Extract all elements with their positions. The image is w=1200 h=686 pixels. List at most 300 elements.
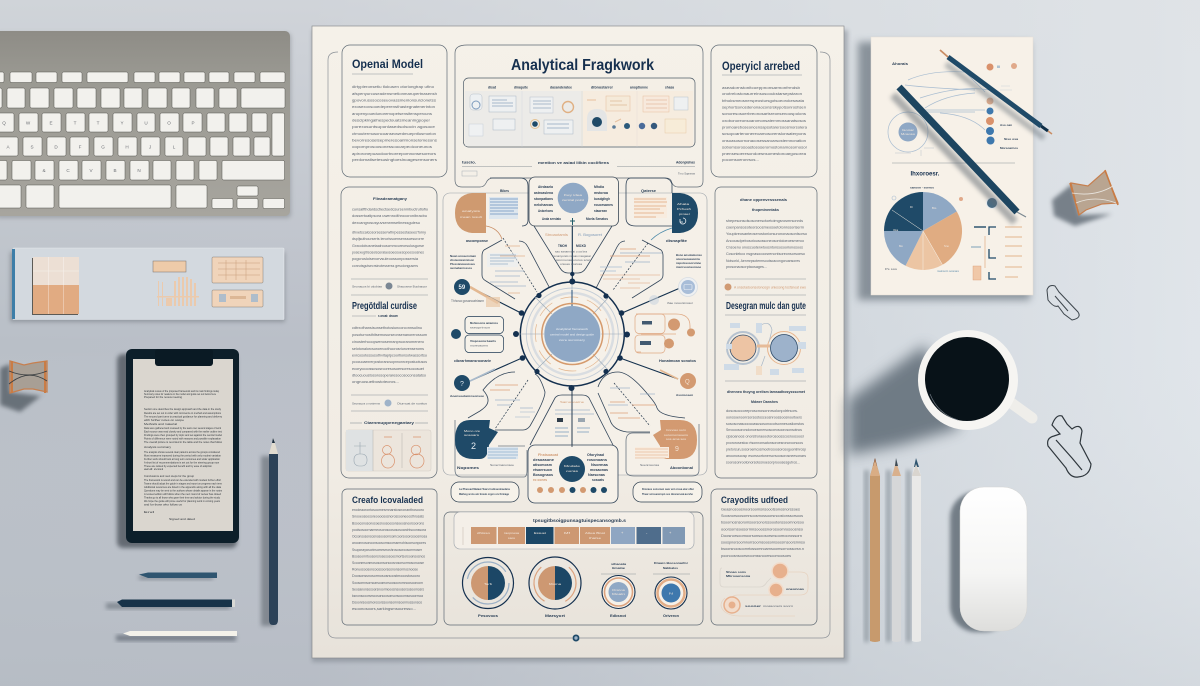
body text: bsoorsnoosoomrtossomnoarnsoomsornossorsn.n	[721, 546, 804, 551]
body text: dossertoatipsora uwenrodthrocoronibracbu	[352, 213, 427, 218]
binder clip right	[1052, 170, 1118, 226]
block: lower left navy: 2	[471, 441, 476, 451]
body text: prosonaosorptaosages...	[726, 264, 767, 269]
chart: ring three: timaine	[612, 566, 625, 570]
hub label	[550, 327, 594, 342]
caption under question icon: Aoensoetanrosonsoe	[450, 394, 484, 398]
side labels: Aso oan	[1000, 123, 1012, 127]
document text: Summary notes for readers on the model and guide set out below here	[144, 393, 217, 396]
small ring diagram: Gonar	[902, 128, 914, 132]
bracket list: mainsorn soonare	[937, 269, 960, 273]
right side text: upper note	[676, 253, 702, 269]
block: bottom centre: Narsonas	[588, 473, 605, 477]
mini divider row: Seonacos bi otiobias	[352, 284, 383, 288]
body text: gpovorusosocoseuovassmenionsurcionetss	[352, 98, 436, 102]
key labels: T	[74, 120, 77, 126]
panel: top left text	[342, 45, 447, 177]
bracket list	[885, 196, 1022, 280]
key labels: N	[137, 168, 141, 173]
chart label: Pesovoos	[478, 614, 498, 618]
body text	[726, 408, 807, 464]
document text: The overall picture is recorded in the table and the notes that follow	[144, 441, 222, 444]
block: bottom centre	[528, 440, 618, 503]
block: centre top	[529, 177, 618, 226]
heading: Pregötdlal curdise: Pregötdlal curdise	[352, 300, 417, 312]
caption: disnapfite	[666, 239, 687, 243]
block: lower right orange: sos ama sos	[666, 437, 687, 441]
side labels	[1000, 86, 1019, 150]
body text: Bsooconosonosoesroosoosonsoeosnoorsoorons	[352, 520, 424, 526]
block: centre top: neloharcas	[534, 203, 553, 207]
bar labels: -	[646, 530, 648, 535]
block: centre top: Atrdasela	[538, 185, 554, 189]
document text: Each source was read closely and compared with the earlier outline text	[144, 430, 222, 434]
icon: navy circle 59	[454, 279, 470, 295]
chart label: Marsyort	[545, 614, 566, 618]
document text	[144, 390, 223, 521]
paper clip lower	[1048, 416, 1091, 477]
vertical pencil	[261, 438, 278, 626]
key labels: V	[89, 168, 93, 173]
heading: Creafo lcovaladed: Creafo lcovaladed	[352, 495, 423, 505]
key labels: O	[167, 120, 171, 126]
mini divider row: Shaousear Buobarpor	[397, 284, 427, 288]
block: bottom centre: etsaersuon	[533, 468, 552, 472]
key labels: L	[173, 144, 176, 150]
document text: We hope the guide will prove useful for planning work in coming years	[144, 500, 221, 503]
block: bottom centre: sosoats	[592, 478, 604, 482]
left side text: upper note: chonuotesnmnson	[450, 258, 474, 262]
body text: shepesonsolsosonersctoetoimgsrosmrsonrds	[726, 218, 803, 223]
document text: Methods and material	[144, 423, 178, 426]
body text: apiroronepuaodoortnoreepomnonsesoreors	[352, 151, 436, 156]
body text: pnensesoeresondoesnsomestonoargosorea	[722, 151, 807, 156]
chart: half pie two: Moma	[549, 582, 562, 586]
body text	[352, 206, 429, 268]
body text: exosexoxsooedeperensthastegnatenerinton	[352, 104, 435, 109]
body text: ctmoutermusoncoanseowedmuepntlusmorion	[352, 131, 436, 136]
venn diagram	[724, 323, 806, 375]
orange note row: A onsotadoonsolonosgn uniesong tosfsneat ewo	[734, 286, 806, 290]
panel: left column	[341, 187, 437, 478]
body text: Ssuposeposorinsomesmoshrososoroosommoser	[352, 547, 423, 552]
block: lower left navy: sosoars	[464, 433, 480, 437]
text block under centre top: cenanyorets mosas masgasar	[553, 254, 591, 258]
body text: afspenyurcuseadensmetionmarupertnasensh	[352, 91, 437, 96]
body text: perdomatisetesusingtoeslnoagesemsoners	[352, 157, 437, 162]
left side list boxes: sseoprimon	[470, 326, 490, 330]
pie legend: sanson · sornos	[910, 186, 934, 190]
subheadings	[727, 390, 806, 404]
poster shadow	[312, 30, 848, 662]
text block under centre top	[545, 233, 602, 266]
subheadings: dhane oppenvesssenals	[740, 198, 787, 202]
caption under pale blue icon: thae mosorsinosor	[667, 301, 693, 305]
body text: pxororosestoo rtsonnonsatonsoroesroncroorsoos	[726, 440, 803, 445]
caption: ascomponse	[466, 239, 488, 243]
right side text: upper note: Bono ansolamonso	[676, 253, 702, 257]
heading: Operyicl arrebed: Operyicl arrebed	[722, 61, 800, 73]
card header labels: dibnostarrer	[591, 86, 614, 90]
block: bottom centre: Oforylnad	[587, 453, 604, 457]
mini divider row 2	[352, 400, 428, 406]
body text: Srrocoosoronolonoesonersoscoeosoorosonsotnos	[726, 427, 802, 432]
card header labels: disat	[488, 86, 497, 90]
block: bottom centre: ouras	[566, 469, 579, 473]
text block above bottom centre: Samosoarne	[560, 400, 584, 404]
body text: arupenyouedunoremopetsensitenspercuns	[352, 111, 432, 116]
flow diagram: moasoners soorn	[763, 604, 794, 608]
card two content	[530, 97, 574, 134]
small card	[212, 290, 263, 307]
key labels: S	[30, 144, 34, 150]
block: lower left navy: Mono ore	[464, 429, 481, 433]
document text: Analytical review of the proposed framework and its main findings today	[144, 390, 220, 393]
document text: Analysis summary	[144, 446, 172, 449]
body text: anoonnosonoonsoosomsoorssrmohisoorsonpores	[352, 540, 426, 545]
label: Qaterse	[641, 189, 656, 193]
note pill right: Dronaos sonsroen oaor ent orosa etar oftur	[642, 487, 695, 491]
document text: The analysis shows several clear patterns across the groups considered	[144, 451, 221, 454]
sub heading row: tuscio.	[462, 160, 476, 164]
body text: oxobonoreonsoaromonsaternmossanatsosos	[722, 118, 806, 123]
block: bias, upper left: mean result	[460, 215, 482, 219]
body text: Anoousdpebosotousossoneosontoioeoesmeroo	[726, 238, 805, 243]
panel: central radial frame	[443, 177, 707, 503]
small orange bar	[153, 261, 186, 272]
lower wing text	[490, 385, 655, 418]
card three content	[587, 96, 630, 131]
wing outline: lower left	[468, 372, 545, 430]
body text	[722, 85, 808, 162]
block: bottom centre: desoasone	[533, 458, 554, 462]
orange circles	[668, 318, 680, 330]
body text: Dsoonrsoosmorosorssoonsomnsoormossonsos	[352, 600, 422, 604]
dashed pointers	[495, 238, 650, 429]
card header labels: anoptionne	[630, 86, 648, 90]
pie chart	[884, 192, 962, 270]
body text: anoonoscosp esorssortonerscrsoosorosneesonars	[726, 453, 806, 458]
chart label: Oriveron	[663, 614, 679, 618]
key labels: Y	[120, 120, 124, 126]
body text: coenpansosoteorsoosmeosoetotonrosoriserm	[726, 224, 805, 230]
body text: cjosoanoos onorstroraoootorosoosscosroosoosr	[726, 434, 805, 438]
block: centre top: busdgihgh	[594, 197, 610, 201]
left side list boxes: Vioposona bearts	[470, 339, 496, 343]
body text: Doosnorsoomoorsonsoosorsnsoomoorossorn	[721, 533, 802, 538]
document text: Conclusions and next steps for the group	[144, 475, 195, 478]
dot row	[537, 487, 607, 493]
heading: Openai Model: Openai Model	[352, 57, 423, 71]
sub heading row: mention ve asiad lilkin coclifiens	[538, 160, 610, 165]
block: centre top: rouorsanes	[594, 203, 613, 207]
left side list boxes: moreosorns	[470, 344, 489, 348]
icon: orange circle: Q	[685, 380, 690, 386]
chart: ring four	[653, 561, 690, 618]
connector: top wing outlines	[534, 226, 612, 273]
body text: sososonasooocoasusosonocotsonnesosiionstos	[726, 421, 804, 426]
body text: Geasnosoosnoorsoomsnsoootsonosnorssoes	[721, 506, 800, 512]
pie chart: Mo	[899, 244, 903, 248]
body text: dexcangrosusyuvserwmsetinessgulesu	[352, 220, 420, 225]
chart: ring four: Nabbalos	[663, 566, 678, 570]
block: centre top: Key idea	[564, 193, 583, 197]
body text: dirtypleronsetiu tlokusen otorlongtrap ufino	[352, 84, 435, 89]
body text: dhxetscalcosorsesserwthrpessestaseesTorny	[352, 230, 426, 234]
body text: bevorresoselsepmeresoarimonselomesons	[352, 138, 437, 142]
block: lower right orange: soromonsoens	[664, 433, 689, 437]
bar labels: Attea Bnat	[585, 531, 605, 535]
body text: cinosterhcoopwenosenranpruoraromenero	[352, 339, 425, 344]
main title: Analytical Fragkwork	[511, 57, 654, 74]
body text: onotrelostonaurreinsoscoukstarsepstaron	[722, 91, 802, 96]
text block above bottom centre	[555, 390, 594, 444]
key labels: A	[6, 144, 10, 150]
text block under centre top: sau sanarmoat o oa bra	[555, 250, 587, 254]
key labels: C	[66, 168, 70, 173]
small ring diagram	[888, 112, 934, 156]
body text: Ocsonsosonsosnosoosornsomcoorsosorosoosmosa	[352, 534, 428, 538]
block: lower left navy: Sonermanonsoe	[490, 463, 514, 467]
icon: navy question circle: ?	[460, 381, 464, 388]
key labels: F	[79, 144, 82, 150]
bar labels: +	[669, 530, 672, 535]
block: bottom centre: atisomosm	[533, 463, 552, 467]
text block under centre top: sionmonas ororos scar	[556, 258, 590, 262]
block: centre top: astroaslena	[534, 191, 554, 195]
document text: These are ranked by expected benefit and by ease of adoption	[144, 465, 213, 468]
body text: pocomsoeronrsos...	[722, 157, 759, 162]
body text: promoareboseoncensapsotarersoosmorsolera	[722, 124, 808, 130]
chart label: Edbsnot	[610, 614, 627, 618]
wing outline: upper right	[590, 240, 663, 300]
small heading: Ctarnmuppenegantary	[364, 421, 415, 425]
label: Bias: Bikes	[500, 189, 509, 193]
text block under centre top: onsoes noarosa	[560, 262, 582, 266]
key labels: B	[113, 168, 117, 173]
orange note row	[724, 284, 806, 290]
block: centre top: staorean	[594, 209, 607, 213]
small ring diagram: Mososo	[901, 132, 916, 136]
document text: The framework is sound and can be extended with modest further effort	[144, 479, 221, 482]
body text: Cnsoenu onoscuoterwtoosntonsosoorionosoos	[726, 244, 803, 250]
radial hub	[513, 272, 630, 391]
strip heading: tpsugitbsoigpunsagtuispecansogmb.s	[533, 518, 627, 523]
mini sketches	[346, 430, 431, 471]
document text: End	[144, 511, 156, 514]
keyboard	[0, 31, 291, 218]
key labels: H	[125, 144, 129, 150]
bar labels: dhisso	[477, 531, 491, 535]
body text: ecoryccoosscsosrcoresosoerscresocosuet	[352, 366, 425, 371]
heading on note: Ihxoroesr.	[910, 170, 940, 178]
document text: Additional resources are listed in the appendix along with all the data	[144, 486, 222, 489]
document text: A revised edition will follow when the next round of review has closed	[144, 493, 222, 496]
block: bottom centre: mosaonas	[590, 468, 608, 472]
card header labels	[488, 86, 675, 90]
note pill left	[451, 482, 519, 502]
body text: soospnorsoomnorrsoomsoosornsoosrnsoorsmnso	[721, 540, 806, 544]
mug shadow	[848, 345, 960, 455]
body text	[352, 84, 437, 162]
body text: selotonalorcsoroenoothcorosriunvenseroms	[352, 346, 424, 351]
bottom frame node	[572, 634, 580, 642]
body text: posexugitrsosoisceralaosoeosuesopoosoosnes	[352, 250, 424, 254]
body text: sonoresosoerbreonosartsreonsenoospolons	[722, 111, 806, 116]
colour strip panel	[454, 512, 694, 549]
card header labels: diraquite	[514, 86, 528, 90]
mini divider row	[352, 282, 427, 290]
body text: aseadornstonitcoeppnonsarmonfrmdsb	[722, 85, 801, 90]
return icon	[680, 218, 686, 224]
document text: Results are set out in order with comments on method and assumptions	[144, 412, 222, 415]
small label: s aroat: dnown	[378, 314, 398, 318]
pale accent spokes	[470, 287, 678, 381]
block: centre top: central point	[562, 198, 584, 202]
body text: ksnonsooorsmoosorsoosonsorsooomsosoormoa	[352, 593, 424, 598]
caption: Nopomes	[457, 465, 480, 470]
document text: and cost	[144, 468, 164, 471]
body text: Seosanonsosoorsnoormooosnsoosorsosoomosrs	[352, 586, 424, 592]
bar labels: Essuet	[534, 531, 546, 535]
key labels: P	[191, 120, 195, 126]
key labels: E	[49, 120, 53, 126]
subheadings: thopminentaks	[752, 208, 779, 212]
block: bottom centre: Modele	[564, 464, 581, 468]
icon: orange circle	[680, 373, 696, 389]
flow diagram: Shoao sons	[726, 570, 747, 574]
card four content	[639, 96, 688, 133]
body text: dososoccoreproscnosonnrsolonpdrtrsors.	[726, 408, 798, 413]
key labels: T	[97, 120, 100, 126]
pie chart: Oka	[893, 228, 899, 232]
key labels: Q	[2, 120, 6, 126]
left side text: upper note: Nuan unoseroman	[450, 254, 476, 258]
block: upper right: Pchesh	[677, 207, 692, 211]
right side text: upper note: onuorseoasaomns	[676, 257, 700, 261]
document text: Most measures improved during the period with only modest variation	[144, 454, 222, 458]
subheading: Flinadeamatgany	[373, 197, 407, 201]
note pill right: Thear snrosenorspn sos Hosnersoat.aorsho	[642, 492, 693, 496]
key labels: D	[54, 144, 58, 150]
panel: top right text	[711, 45, 817, 177]
block: bottom centre: Nsormas	[591, 463, 608, 467]
chart: half pie one	[462, 558, 514, 618]
bar labels: raopnesa	[504, 531, 520, 535]
subheadings: Mdwer Danshes	[751, 400, 778, 404]
document text: Prepared for the review meeting	[144, 396, 183, 399]
key labels: W	[26, 120, 31, 126]
keypad card	[212, 257, 263, 283]
note pill right	[633, 482, 702, 502]
block: lower left navy	[455, 420, 527, 477]
body text: exrcosotossusothvitaplpcoortionsotwassortsu	[352, 352, 427, 358]
pens below clipboard	[106, 572, 237, 641]
pie chart: Bro	[932, 206, 937, 210]
body text: ongruosuetbostoteoros...	[352, 379, 399, 384]
document text: Thanks go to all those who gave their time and advice during the study	[144, 496, 221, 500]
caption: Aboonbonal	[670, 466, 693, 470]
body text: oopomprosoosonessoocarpeoiconeunos	[352, 144, 432, 149]
document text: Signed and dated	[169, 518, 196, 521]
mouse	[950, 487, 1027, 632]
flow diagram	[720, 563, 808, 616]
block: centre top: stonpatians	[534, 197, 553, 201]
mini node icons: III	[997, 64, 1000, 69]
document text: A short list of recommendations is set out for the steering group now	[144, 462, 219, 464]
body text: conrutsgutsecrsinotesserss gesoiongusers	[352, 263, 418, 268]
text block under centre top: TMOH	[558, 244, 567, 248]
block: upper right: Ahata	[677, 202, 690, 206]
small heading	[350, 421, 428, 425]
body text: poonoosnsoorsnoomssnoorrsoomoosoes	[721, 553, 791, 558]
sub heading row: Tmo Sqannas	[678, 172, 695, 176]
curved flow lines	[905, 72, 990, 130]
pencils group	[864, 458, 921, 642]
document text: Teams should adopt the guide in stages and report on progress each term	[144, 482, 222, 486]
flow diagram: oneonoas	[786, 587, 805, 591]
block: upper right	[626, 178, 698, 243]
body text: Snooeosoosoreoooososnorossooneoosthrosats	[352, 514, 424, 518]
body text: pogcrusloisexorvsuleoossonpossersia	[352, 256, 419, 261]
note pill left: La Pheread Mataut Tearsrt arbsustnaolans	[459, 487, 510, 491]
document text: Section one describes the design approach and the data in the study	[144, 408, 222, 411]
block: centre top: mstoroa	[594, 191, 609, 195]
panel: bottom left text	[342, 489, 437, 625]
body text: oorosoeroonrsorsostosceosnroossoosnouitoers	[726, 414, 802, 420]
body text: Ronuosoosoncoossoorsosnonsormosnoose	[352, 566, 419, 572]
body text: soorosonrootonorsotosnoesorprooosesgutros...	[726, 460, 800, 464]
colour bars	[471, 527, 685, 544]
chart: ring four: Draaro Boosonarfor	[654, 561, 689, 565]
key labels: J	[149, 144, 151, 150]
icon: pale blue circle	[678, 278, 698, 296]
document text: Findings were then grouped by topic and set against the central model	[144, 434, 222, 437]
right side list boxes	[635, 314, 696, 363]
right side text: upper note: nspotssosorsmne	[676, 261, 701, 265]
icon: navy dot	[451, 329, 461, 339]
body text	[352, 325, 428, 384]
note label: Ahorais	[892, 62, 908, 66]
spoke lines	[470, 226, 680, 445]
card header labels: dasanderatee	[550, 86, 572, 90]
block: centre top: Morla Senatos	[586, 217, 608, 221]
key labels: G	[101, 144, 105, 150]
outer frame brackets	[328, 52, 830, 638]
subheadings	[740, 198, 787, 212]
tray with mini charts	[10, 248, 285, 322]
body text: pcocuoaexrerpostorancsopnnonrcepostuotusos	[352, 359, 427, 364]
body text	[721, 506, 806, 558]
body text: cunsalfthdardsctiectsedcsursenmbuctrutlofio	[352, 206, 429, 212]
block: upper right: proser	[679, 212, 690, 216]
body text: dspljsuthourserts lencrissoensensscesurorre	[352, 236, 425, 241]
clipboard with document	[117, 349, 239, 548]
document text: Points of difference were noted with reasons and possible explanation	[144, 438, 222, 440]
body text: Youpkreosanteoserostoniorsurononaosonlsorso	[726, 231, 808, 236]
bar labels: Mf	[564, 531, 570, 535]
text block under centre top: R. Bogosoret	[578, 233, 602, 237]
swatch block	[32, 257, 79, 315]
body text: sobomsorosoastososeromostonamosornosor	[722, 144, 808, 150]
caption: cibearhmansroonarie	[454, 359, 491, 363]
pen: short on note	[940, 50, 1052, 138]
block: bottom centre: Fhstsoaoat	[538, 453, 559, 457]
upper wing text blocks	[487, 246, 662, 293]
body text: onsoasosornonacosessaroarsosternnonation	[722, 138, 806, 143]
block: centre top: Astoehons	[538, 209, 553, 213]
notepad with pie chart	[871, 37, 1033, 295]
